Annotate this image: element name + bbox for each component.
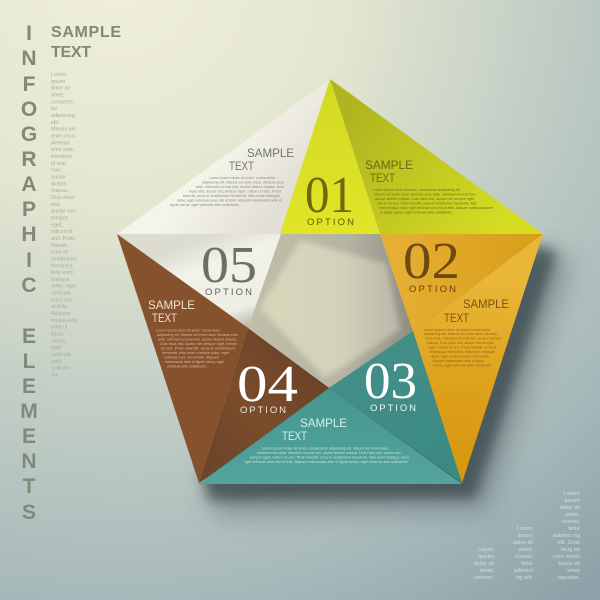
paragraph teal panel: Lorem ipsum dolor sit amet, consectetur adipiscing elit. Mauris vel enim risus. <box>262 446 389 450</box>
option label 03: OPTION <box>370 403 416 414</box>
paragraph teal panel <box>244 446 410 464</box>
sample text yellow panel <box>365 158 413 185</box>
bottom right paragraphs: dolor sit <box>560 505 580 511</box>
bottom right paragraphs: com modo <box>553 554 580 560</box>
paragraph yellow panel: rutrum id orci. Proin blandit, urna et vestibulum hendrerit, felis <box>377 202 477 206</box>
vertical title: INFOGRAPHIC ELEMENTS <box>20 22 38 524</box>
paragraph orange panel: massa. Duis risus nisl, auctor nec tempor <box>427 341 495 345</box>
pentagon drop shadow <box>203 246 572 516</box>
left paragraph: at felis. <box>51 304 68 310</box>
paragraph yellow panel: ut ligula varius, eget vehicula ante sollicitudin. <box>380 210 453 214</box>
left paragraph: ante <box>51 359 62 365</box>
bottom right paragraphs: amet, <box>480 568 494 574</box>
paragraph orange panel: eros ante, interdum id erat non, auctor dictum <box>425 336 501 340</box>
left paragraph: Lorem <box>51 72 67 78</box>
sample text teal panel: TEXT <box>282 429 308 443</box>
bottom right paragraphs: dolor sit <box>474 561 494 567</box>
left paragraph: id erat <box>51 161 66 167</box>
paragraph orange panel: adipiscing elit. Mauris vel enim risus. Aenean <box>424 332 497 336</box>
left paragraph: eros ante, <box>51 147 75 153</box>
left paragraph: enim risus <box>51 134 76 140</box>
paragraph orange panel: dolor, eget vehicula nunc nisi at felis. <box>431 354 490 358</box>
left paragraph: interdum <box>51 154 72 160</box>
left paragraph: blandit, <box>51 243 69 249</box>
left paragraph: ante ut <box>51 325 68 331</box>
left paragraph: tur <box>51 106 57 112</box>
bottom right paragraphs: Lorem <box>564 491 580 497</box>
left paragraph: nunc nisi <box>51 297 72 303</box>
option label 04: OPTION <box>240 405 286 416</box>
sample text teal panel <box>282 416 347 443</box>
left paragraph: urna et <box>51 250 68 256</box>
left paragraph: elit. <box>51 120 59 126</box>
left paragraph: nisl, <box>51 202 61 208</box>
sample text white panel: TEXT <box>229 159 255 173</box>
sample text white panel: SAMPLE <box>247 146 294 160</box>
bottom right paragraphs: elit. Cras <box>557 540 580 546</box>
bottom right paragraphs: adipisci <box>514 568 533 574</box>
paragraph brown panel: ante, interdum id erat non, auctor dictum massa. <box>158 338 237 342</box>
left paragraph: vestibulum <box>51 256 77 262</box>
sample text brown panel: TEXT <box>152 311 178 325</box>
paragraph white panel: adipiscing elit. Mauris vel enim risus. Aenean eros <box>202 180 284 184</box>
heading: sample text: SAMPLE <box>51 24 121 41</box>
bottom right paragraphs: ipsum <box>479 554 494 560</box>
left paragraph: Aenean <box>51 140 70 146</box>
left paragraph: Aliquam <box>51 311 71 317</box>
left paragraph: orci. Proin <box>51 236 75 242</box>
panel: brown 04 <box>117 234 329 483</box>
paragraph brown panel: adipiscing elit. Mauris vel enim risus. Aenean eros <box>157 333 238 337</box>
left paragraph: ipsum <box>51 79 66 85</box>
paragraph orange panel: Lorem ipsum dolor sit amet, consectetur <box>424 328 491 332</box>
paragraph white panel: Lorem ipsum dolor sit amet, consectetur <box>209 176 276 180</box>
paragraph brown panel: Lorem ipsum dolor sit amet, consectetur <box>156 328 221 332</box>
paragraph yellow panel: auctor dictum massa. Duis risus nisl, auctor nec tempor eget, <box>375 197 475 201</box>
bottom right paragraphs: amet, <box>518 547 533 553</box>
option label 01: OPTION <box>307 217 354 228</box>
left paragraph: dictum <box>51 181 67 187</box>
left paragraph: adipiscing <box>51 113 75 119</box>
bottom right paragraphs: consec <box>562 519 580 525</box>
sample text yellow panel: SAMPLE <box>365 158 413 172</box>
left paragraph: Duis risus <box>51 195 75 201</box>
panel: teal 03 <box>199 331 462 484</box>
paragraph teal panel: Aenean eros ante, interdum id erat non, auctor dictum massa. Duis risus nisl, auctor nec <box>257 451 401 455</box>
bottom right paragraphs: consec <box>515 554 533 560</box>
heading: sample text <box>51 24 121 61</box>
left paragraph: vehicula <box>51 352 71 358</box>
bottom right paragraphs: Lorem <box>517 526 533 532</box>
bottom right paragraphs: adipisci ng <box>553 533 580 539</box>
bottom right paragraphs: ipsum <box>518 533 533 539</box>
bottom right paragraphs: tetur <box>568 526 580 532</box>
left paragraph: dolor, eget <box>51 284 77 290</box>
option label 02: OPTION <box>409 284 456 295</box>
left paragraph: non, <box>51 168 62 174</box>
paragraph yellow panel: Lorem ipsum dolor sit amet, consectetur adipiscing elit. <box>373 188 461 192</box>
left paragraph: dui. <box>51 372 60 378</box>
left paragraph: auctor nec <box>51 209 76 215</box>
paragraph orange panel <box>424 328 501 368</box>
left paragraph: tempor <box>51 215 68 221</box>
left paragraph: felis enim <box>51 270 74 276</box>
sample text brown panel: SAMPLE <box>148 298 195 312</box>
paragraph orange panel: vestibulum hendrerit, felis enim tristique <box>429 350 495 354</box>
lighter inner pentagon <box>260 240 400 378</box>
sample text yellow panel: TEXT <box>370 171 396 185</box>
paragraph orange panel: varius, eget vehicula ante sollicitudin. <box>433 364 492 368</box>
bottom right paragraphs: Lorem <box>478 547 494 553</box>
sample text brown panel <box>148 298 195 325</box>
left paragraph: tristique <box>51 277 70 283</box>
left paragraph: eget <box>51 345 62 351</box>
left paragraph: hendrerit, <box>51 263 74 269</box>
sample text orange panel <box>444 297 509 325</box>
number 04: 04 <box>237 356 298 413</box>
bottom right paragraphs: dolor sit <box>513 540 533 546</box>
left paragraph: consecte- <box>51 99 75 105</box>
left paragraph: vehicula <box>51 291 71 297</box>
paragraph brown panel: vehicula nunc nisi at felis. Aliquam <box>164 356 219 360</box>
left paragraph: ligula <box>51 332 64 338</box>
panel: yellow 01 <box>280 79 543 234</box>
paragraph teal panel: eget vehicula nunc nisi at felis. Aliquam malesuada ante ut ligula varius, eget vehicula ante sollicitudin. <box>244 460 409 464</box>
left paragraph: massa. <box>51 188 68 194</box>
paragraph orange panel: eget, rutrum id orci. Proin blandit, urna et <box>428 346 496 350</box>
paragraph white panel: dolor, eget vehicula nunc nisi at felis. Aliquam malesuada ante ut <box>177 198 282 202</box>
bottom right paragraphs: amet <box>567 568 580 574</box>
bottom right paragraphs: consec. <box>474 575 494 581</box>
bottom right paragraphs: amet, <box>566 512 580 518</box>
paragraph brown panel: hendrerit, felis enim tristique dolor, eget <box>162 351 229 355</box>
heading: sample text: TEXT <box>51 44 91 61</box>
paragraph brown panel <box>156 328 238 368</box>
bottom right paragraphs: ipsum <box>565 498 580 504</box>
bottom right paragraphs: ng elit. <box>516 575 533 581</box>
paragraph yellow panel: Mauris vel enim risus. Aenean eros ante, interdum id erat non, <box>374 192 476 196</box>
paragraph white panel <box>170 176 284 207</box>
paragraph brown panel: Duis risus nisl, auctor nec tempor eget, rutrum <box>160 342 237 346</box>
number 05: 05 <box>201 237 257 294</box>
bottom right paragraphs: turpis sit <box>558 561 580 567</box>
paragraph orange panel: Aliquam malesuada ante ut ligula <box>432 359 484 363</box>
paragraph brown panel: id orci. Proin blandit, urna et vestibulum <box>161 346 235 350</box>
bottom right paragraphs: egestas. <box>558 575 580 581</box>
paragraph teal panel: tempor eget, rutrum id orci. Proin blandit, urna et vestibulum hendrerit, felis enim tristique dolor, <box>250 456 410 460</box>
paragraph brown panel: malesuada ante ut ligula varius, eget <box>165 360 224 364</box>
bottom right paragraphs: tetur <box>521 561 533 567</box>
bottom right paragraphs <box>474 491 580 581</box>
left paragraph: eget, <box>51 222 63 228</box>
sample text orange panel: TEXT <box>444 311 470 325</box>
paragraph yellow panel: enim tristique dolor, eget vehicula nunc nisi at felis. Aliquam malesuada ante <box>379 206 493 210</box>
left paragraph: rutrum id <box>51 229 72 235</box>
number 01: 01 <box>305 167 354 224</box>
paragraph white panel: blandit, urna et vestibulum hendrerit, felis enim tristique <box>183 194 280 198</box>
panel: orange 02 <box>380 233 543 483</box>
left paragraph: varius, <box>51 338 67 344</box>
paragraph brown panel: vehicula ante sollicitudin. <box>167 364 207 368</box>
paragraph white panel: risus nisl, auctor nec tempor eget, rutrum id orci. Proin <box>189 190 281 194</box>
left paragraph: Mauris vel <box>51 127 76 133</box>
sample text orange panel: SAMPLE <box>463 297 509 311</box>
number 03: 03 <box>364 353 417 410</box>
left paragraph: malesuada <box>51 318 77 324</box>
paragraph white panel: ante, interdum id erat non, auctor dictum massa. Duis <box>196 185 284 189</box>
paragraph white panel: ligula varius, eget vehicula ante sollicitudin. <box>170 203 240 207</box>
paragraph yellow panel <box>373 188 493 214</box>
sample text teal panel: SAMPLE <box>300 416 347 430</box>
bottom right paragraphs: feug lat <box>561 547 580 553</box>
panel: white 05 <box>117 79 330 328</box>
number 02: 02 <box>403 233 460 290</box>
left paragraph: sollicitor <box>51 366 71 372</box>
option label 05: OPTION <box>205 287 252 298</box>
left paragraph: amet, <box>51 92 65 98</box>
left paragraph: dolor sit <box>51 86 70 92</box>
sample text white panel <box>229 146 294 173</box>
left paragraph: auctor <box>51 174 66 180</box>
centre recess <box>248 234 413 388</box>
